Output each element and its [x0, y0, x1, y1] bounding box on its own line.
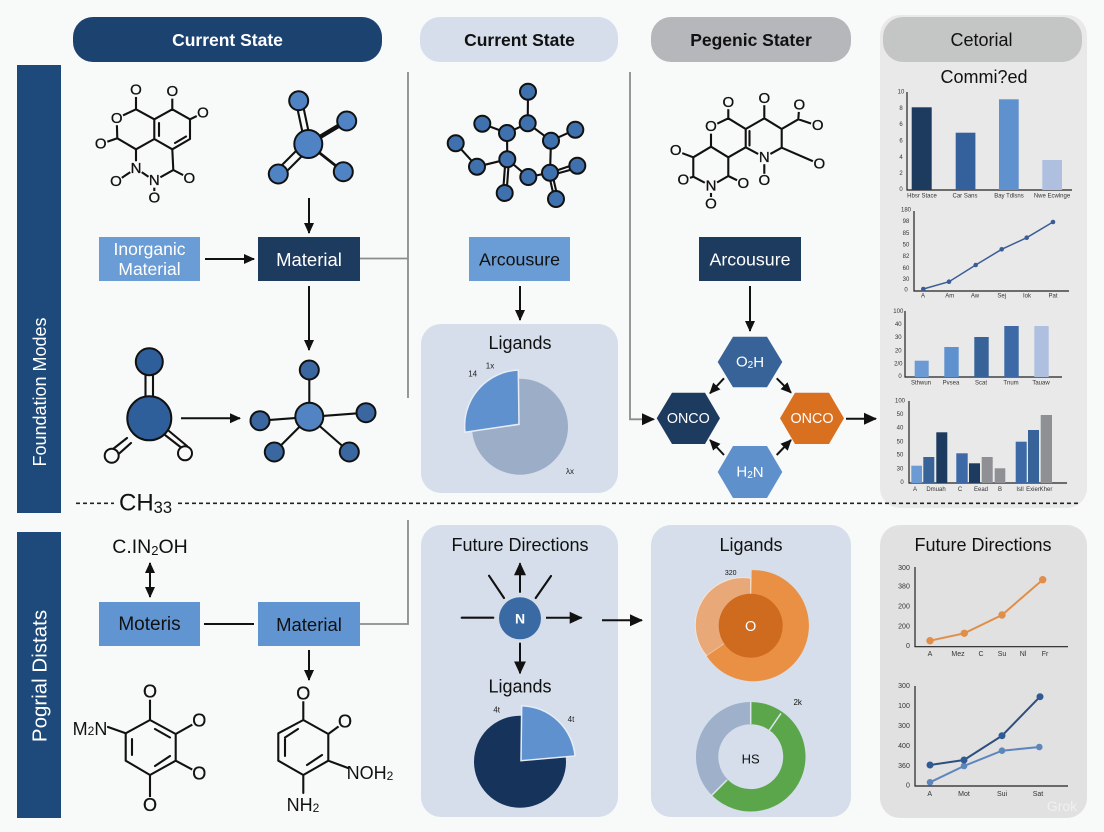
bar chart 3: 50	[897, 453, 904, 459]
hexagon: ONCO navy	[657, 393, 720, 444]
box: inorganic material: Material	[118, 259, 181, 279]
box: arcousure dark: Arcousure	[709, 250, 791, 270]
pie chart dark	[474, 706, 575, 808]
line chart blue: A	[927, 791, 932, 798]
title: future directions right: Future Directions	[914, 535, 1052, 555]
bar chart 3: 50	[897, 439, 904, 445]
bar chart 1: Hbsr Stace	[907, 194, 937, 200]
hexagon: H2N: 2	[747, 470, 753, 480]
connector: moteris to material	[204, 623, 254, 625]
orange donut chart: O	[745, 619, 756, 635]
molecule: polycyclic top right: O	[737, 175, 749, 192]
bar chart 2: 100	[893, 309, 904, 315]
arrow: to branched molecule	[181, 417, 240, 419]
line chart blue: Sat	[1033, 791, 1043, 798]
molecule: fused ring top left: N	[131, 160, 141, 177]
pie labels	[468, 362, 574, 476]
bar chart 3: Exier	[1026, 487, 1040, 493]
arrow: inorganic to material	[205, 258, 254, 260]
hexagon: H2N	[718, 446, 782, 498]
line chart orange: 0	[906, 643, 910, 650]
bar chart 3: Dmuah	[926, 487, 946, 493]
header: pegenic stater: Pegenic Stater	[690, 30, 812, 50]
sidebar: foundation modes	[17, 65, 61, 513]
panel: future directions: Future Directions	[451, 535, 589, 555]
molecule: NOH2 benzene ring: O	[296, 683, 310, 703]
bar chart 1: Car Sans	[952, 194, 978, 200]
molecule: polycyclic top right: O	[813, 156, 825, 172]
bar chart 1: 4	[899, 155, 903, 161]
hexagon: H2N: N	[753, 464, 764, 480]
molecule: fused ring top left: O	[183, 170, 195, 187]
line chart orange: 380	[898, 584, 910, 590]
line chart 1: 85	[903, 231, 910, 237]
bar chart 3: 0	[900, 480, 904, 486]
molecule: fused ring top left: O	[197, 104, 209, 122]
pie labels: λx	[566, 467, 574, 476]
bar chart 1: 2	[899, 171, 903, 177]
bar chart 2: Pvsea	[943, 380, 960, 386]
line chart orange: 300	[898, 565, 910, 572]
line chart orange: A	[928, 651, 933, 658]
line chart 1: Am	[945, 294, 954, 300]
molecule: fused ring top left: O	[130, 82, 142, 98]
line chart orange: Nl	[1020, 651, 1027, 658]
title: commi?ed: Commi?ed	[940, 67, 1028, 87]
hexagon: O2H: H	[753, 354, 764, 370]
bar chart 1: 0	[899, 187, 903, 193]
pie labels: 4t	[493, 706, 501, 714]
molecule: NOH2 benzene ring: 2	[387, 769, 394, 783]
line chart 1: 30	[903, 277, 910, 283]
molecule: polycyclic top right: O	[705, 196, 717, 212]
label: C.IN2OH: 2	[151, 542, 158, 558]
bar chart 2: 2/0	[894, 362, 903, 368]
header: current state light	[420, 17, 618, 62]
bar chart 3: Kher	[1040, 487, 1052, 493]
molecule: NOH2 benzene ring	[278, 683, 394, 815]
molecule: polycyclic top right: O	[705, 118, 717, 135]
bar chart 2: 30	[895, 335, 902, 341]
sidebar: foundation modes: Foundation Modes	[30, 317, 50, 467]
bar chart 2: 40	[895, 322, 902, 328]
watermark: Grok	[1047, 798, 1078, 814]
molecule: fused ring top left: O	[111, 110, 123, 127]
molecule: fused ring top left: O	[110, 173, 122, 190]
connector lines	[360, 72, 408, 398]
box: arcousure blue	[469, 237, 570, 281]
line chart blue	[898, 683, 1068, 798]
line chart blue: 0	[906, 782, 910, 790]
arrow: orange hexagon to charts	[846, 418, 876, 420]
panel: right column upper background	[880, 15, 1087, 508]
header: cetorial: Cetorial	[950, 30, 1013, 50]
bar chart 3: A	[913, 487, 917, 493]
pie labels	[493, 706, 575, 724]
molecule: NOH2 benzene ring: 2	[313, 801, 320, 815]
header: pegenic stater	[651, 17, 851, 62]
header: current state dark: Current State	[172, 30, 283, 50]
bar chart 1: Bay Tdlsns	[994, 194, 1024, 200]
line chart 1: A	[921, 294, 925, 300]
arrow: arcousure to ligands	[519, 286, 521, 320]
molecule: large atom with oxygens	[105, 348, 192, 463]
hexagon: ONCO orange: ONCO	[791, 411, 833, 427]
hexagon: ONCO navy: ONCO	[667, 411, 710, 427]
header: cetorial	[883, 17, 1082, 62]
sidebar: pogrial distats: Pogrial Distats	[28, 610, 52, 742]
line chart 1: 98	[903, 219, 910, 225]
panel: right column lower background	[880, 525, 1087, 818]
line chart blue: 100	[898, 703, 910, 710]
molecule: fused ring top left: O	[148, 190, 160, 206]
molecule: NOH2 benzene ring: O	[338, 712, 352, 732]
line chart orange: Su	[998, 651, 1006, 658]
line chart 1: 0	[904, 288, 908, 294]
line chart orange: Mez	[951, 651, 965, 658]
box: arcousure blue: Arcousure	[479, 250, 560, 270]
bar chart 3: 40	[897, 426, 904, 432]
molecule: polycyclic top right: N	[706, 178, 716, 194]
molecule: polycyclic top right: O	[677, 172, 689, 188]
line chart orange: 200	[898, 604, 910, 610]
molecule: M2N benzene ring	[73, 682, 207, 815]
molecule: fused ring top left	[94, 82, 210, 206]
bar chart 3: 30	[897, 466, 904, 472]
molecule: polycyclic top right: O	[793, 96, 805, 114]
hexagon: O2H: O	[736, 354, 748, 370]
molecule: blue tetrahedral top	[269, 91, 356, 184]
nitrogen hub with arrows: N	[515, 610, 525, 626]
bar chart 2: Sthwun	[911, 380, 931, 386]
arrow: material to ring	[308, 650, 310, 680]
box: inorganic material: Inorganic	[114, 239, 186, 259]
sidebar: pogrial distats	[17, 532, 61, 818]
bar chart 1: 10	[898, 89, 905, 95]
pie chart	[465, 370, 568, 475]
bar chart 2: Tauaw	[1032, 380, 1050, 386]
panel: future directions: Ligands	[488, 677, 552, 697]
line chart 1: 180	[901, 208, 912, 214]
label: C.IN2OH: OH	[158, 536, 188, 558]
molecule: NOH2 benzene ring: NH	[287, 795, 313, 815]
line chart blue: 400	[898, 743, 910, 750]
box: moteris: Moteris	[118, 614, 181, 635]
line chart orange: 200	[898, 624, 910, 630]
hexagon: O2H	[718, 337, 782, 387]
line chart blue: Sui	[997, 791, 1007, 798]
bar chart 3: C	[958, 487, 963, 493]
arrow: molecule to material	[308, 198, 310, 233]
molecule: polycyclic top right	[669, 90, 826, 212]
molecule: fused ring top left: O	[95, 136, 107, 152]
header: current state dark	[73, 17, 382, 62]
molecule: M2N benzene ring: O	[192, 711, 206, 731]
panel: ligands donuts: Ligands	[719, 535, 783, 555]
bar chart 2: 20	[895, 349, 902, 355]
line chart 1: Aw	[971, 294, 980, 300]
nitrogen hub with arrows	[462, 563, 582, 673]
pie labels: 1x	[486, 362, 494, 370]
box: material blue	[258, 602, 360, 646]
line chart 1	[901, 208, 1069, 300]
hexagon: ONCO orange	[780, 393, 844, 444]
green donut chart	[707, 702, 794, 800]
hexagon: O2H: 2	[748, 360, 754, 370]
line chart orange: C	[978, 651, 984, 658]
box: material blue: Material	[276, 614, 342, 635]
panel: future directions	[421, 525, 618, 817]
connector: lower left to future directions	[360, 520, 408, 624]
bar chart 3: Eead	[974, 487, 988, 493]
hexagon: H2N: H	[736, 464, 747, 480]
bar chart 3: B	[998, 487, 1002, 493]
molecule: M2N benzene ring: O	[143, 682, 157, 702]
bar chart 3: 100	[895, 399, 906, 405]
line chart 1: 82	[903, 254, 910, 260]
molecule: polycyclic top right: O	[670, 142, 682, 159]
molecule: M2N benzene ring: 2	[88, 724, 95, 738]
pie labels: 14	[468, 370, 478, 378]
molecule: blue network center	[448, 84, 585, 207]
bar chart 1	[898, 89, 1072, 200]
bar chart 1: 6	[899, 139, 903, 145]
box: moteris	[99, 602, 200, 646]
header: current state light: Current State	[464, 30, 575, 50]
line chart blue: Mot	[958, 791, 970, 798]
line chart 1: Iok	[1023, 294, 1032, 300]
molecule: M2N benzene ring: O	[192, 763, 206, 783]
bar chart 2: 0	[898, 374, 902, 380]
bar chart 3: Isll	[1016, 487, 1024, 493]
connector: second column to ONCO	[630, 72, 654, 419]
bar chart 3	[895, 399, 1067, 493]
line chart orange: Fr	[1042, 651, 1049, 658]
pie labels: 4t	[568, 715, 575, 724]
line chart 1: Pat	[1048, 294, 1058, 300]
molecule: M2N benzene ring: M	[73, 719, 88, 739]
box: arcousure dark	[699, 237, 801, 281]
orange donut chart	[695, 570, 809, 681]
section divider with CH33 label: 33	[154, 499, 172, 517]
molecule: polycyclic top right: O	[722, 94, 734, 111]
molecule: polycyclic top right: O	[812, 117, 824, 134]
label: C.IN2OH: C.IN	[112, 536, 151, 558]
arrow: double vertical	[149, 563, 151, 597]
molecule: polycyclic top right: N	[759, 149, 770, 166]
bar chart 1: 8	[899, 106, 903, 112]
molecule: polycyclic top right: O	[758, 172, 770, 189]
bar chart 2: Scat	[975, 380, 987, 386]
molecule: fused ring top left: N	[149, 172, 160, 189]
molecule: NOH2 benzene ring: NOH	[347, 763, 387, 783]
molecule: branched five-node	[250, 360, 376, 462]
section divider with CH33 label	[76, 490, 1078, 517]
bar chart 1: Nwe Ecwlnge	[1034, 194, 1071, 200]
orange donut label: 320	[725, 570, 737, 577]
box: material dark	[258, 237, 360, 281]
molecule: M2N benzene ring: O	[143, 795, 157, 815]
line chart 1: 60	[903, 266, 910, 272]
line chart blue: 360	[898, 763, 910, 770]
box: material dark: Material	[276, 249, 342, 270]
molecule: polycyclic top right: O	[758, 90, 770, 107]
bar chart 2: Tnum	[1003, 380, 1019, 386]
line chart blue: 300	[898, 683, 910, 690]
bar chart 1: 6	[899, 122, 903, 128]
bar chart 3: 50	[897, 412, 904, 418]
molecule: M2N benzene ring: N	[94, 719, 107, 739]
molecule: fused ring top left: O	[166, 83, 178, 100]
bar chart 2	[893, 309, 1062, 386]
box: inorganic material	[99, 237, 200, 281]
green donut chart: HS	[742, 752, 760, 766]
section divider with CH33 label: CH	[119, 490, 154, 516]
panel: ligands donuts	[651, 525, 851, 817]
line chart blue: 300	[898, 723, 910, 730]
arrow: arcousure to hexagon	[749, 286, 751, 331]
line chart 1: Sej	[997, 294, 1006, 300]
arrow: to ligands panel	[602, 619, 642, 621]
arrows between hexagons	[710, 378, 791, 455]
arrow: material down	[308, 286, 310, 350]
panel: ligands pie	[421, 324, 618, 493]
line chart orange	[898, 565, 1068, 658]
line chart 1: 50	[903, 243, 910, 249]
panel: ligands pie: Ligands	[488, 333, 552, 353]
green donut label: 2k	[793, 698, 803, 707]
